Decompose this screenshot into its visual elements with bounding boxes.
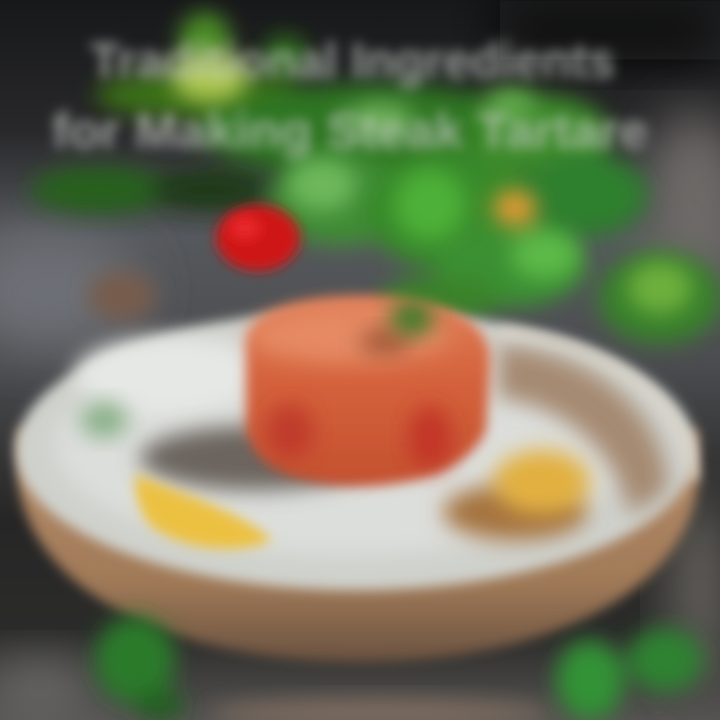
herb sprig on plate xyxy=(80,402,128,438)
lemon on sauce dish xyxy=(494,450,590,514)
plate: rim recess on right xyxy=(498,345,668,515)
sauce dish xyxy=(443,484,587,540)
plate: white ceramic xyxy=(16,310,696,590)
herb garnish background xyxy=(30,12,720,344)
tomato xyxy=(216,205,300,271)
plate: shadow under tartare xyxy=(140,426,370,490)
heading: blurred title text xyxy=(52,33,648,159)
plate: wooden base xyxy=(18,430,698,662)
highlights on leaves xyxy=(172,54,692,314)
heading: blurred title text: for Making Steak Tartare xyxy=(52,103,648,159)
lemon wedge left xyxy=(136,474,272,549)
foreground herbs xyxy=(95,616,703,720)
tartare patty xyxy=(246,296,490,486)
blurred spice on table xyxy=(88,272,156,320)
herb on tartare xyxy=(390,300,434,336)
heading: blurred title text: Traditional Ingredients xyxy=(90,33,615,89)
